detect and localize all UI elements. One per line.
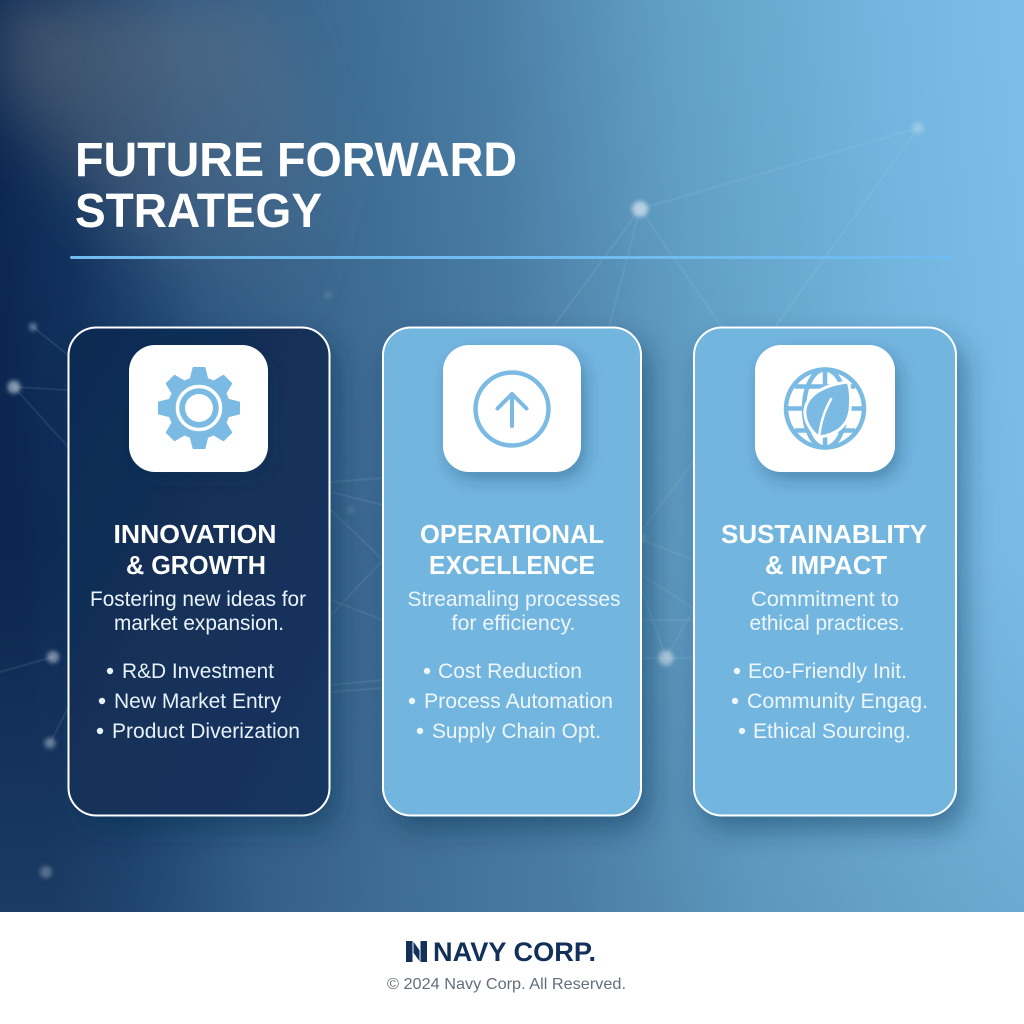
heading: EXCELLENCE xyxy=(429,550,595,580)
footer xyxy=(0,912,1024,1024)
heading: & IMPACT xyxy=(765,550,887,580)
bullet list: Eco-Friendly Init. xyxy=(748,660,907,683)
heading: & GROWTH xyxy=(126,550,266,580)
icon: navy corp logo xyxy=(406,941,427,962)
company name: NAVY CORP. xyxy=(433,937,596,967)
bullet list: Supply Chain Opt. xyxy=(432,720,601,743)
title xyxy=(75,134,517,238)
heading: INNOVATION xyxy=(114,519,276,549)
bullet list: Process Automation xyxy=(424,690,613,713)
card background xyxy=(68,328,330,816)
description xyxy=(90,588,306,635)
title divider xyxy=(70,256,954,259)
bullet list xyxy=(409,660,613,743)
description xyxy=(750,588,904,635)
title: STRATEGY xyxy=(75,185,322,238)
heading xyxy=(420,519,604,580)
description: Streamaling processes xyxy=(408,588,620,611)
panel: innovation and growth xyxy=(68,328,330,816)
bullet list xyxy=(732,660,928,743)
icon: up arrow in circle xyxy=(443,345,581,472)
description: market expansion. xyxy=(114,612,284,635)
bullet list xyxy=(97,660,300,743)
bullet list: Community Engag. xyxy=(747,690,928,713)
description: Commitment to xyxy=(751,588,899,611)
bullet list: Product Diverization xyxy=(112,720,300,743)
heading: SUSTAINABLITY xyxy=(721,519,927,549)
bullet list: Ethical Sourcing. xyxy=(753,720,911,743)
panel: sustainability and impact xyxy=(694,328,956,816)
bullet list: Cost Reduction xyxy=(438,660,582,683)
icon: globe with leaf xyxy=(755,345,895,472)
icon: gear xyxy=(129,345,268,472)
description xyxy=(408,588,620,635)
title: FUTURE FORWARD xyxy=(75,134,517,187)
copyright: © 2024 Navy Corp. All Reserved. xyxy=(387,976,626,993)
description: Fostering new ideas for xyxy=(90,588,306,611)
heading xyxy=(114,519,276,580)
bullet list: New Market Entry xyxy=(114,690,281,713)
card background xyxy=(694,328,956,816)
description: ethical practices. xyxy=(750,612,904,635)
heading xyxy=(721,519,927,580)
heading: OPERATIONAL xyxy=(420,519,604,549)
card background xyxy=(383,328,641,816)
description: for efficiency. xyxy=(452,612,576,635)
bullet list: R&D Investment xyxy=(122,660,274,683)
panel: operational excellence xyxy=(383,328,641,816)
